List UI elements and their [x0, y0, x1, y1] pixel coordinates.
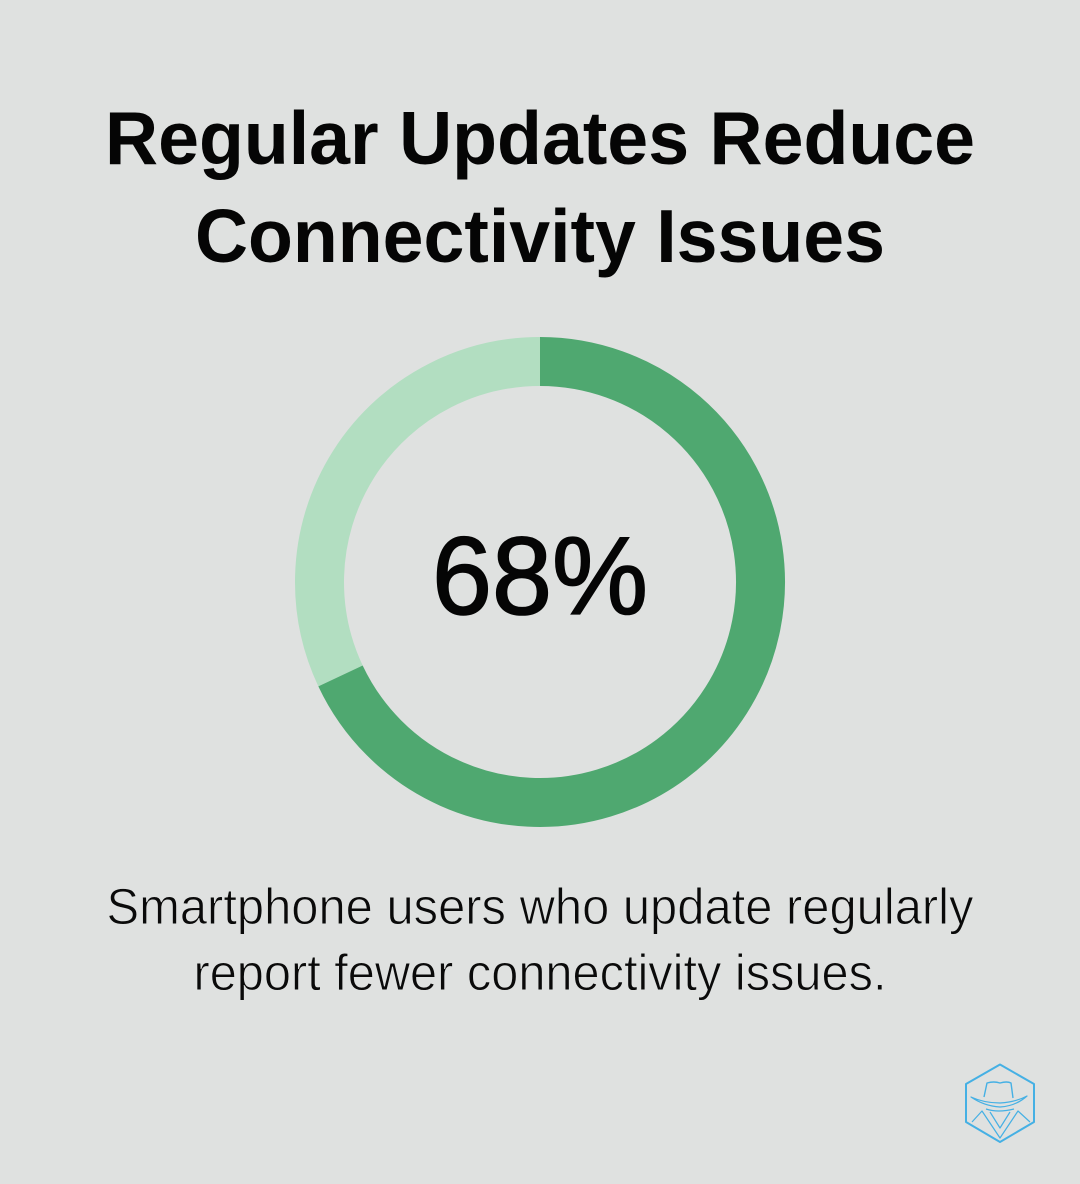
- donut value label: 68%: [432, 515, 648, 638]
- hat crown: [984, 1082, 1013, 1098]
- donut chart: 68%: [320, 362, 761, 802]
- coat collar: [972, 1111, 1030, 1138]
- donut value segment: [340, 362, 761, 802]
- title: Connectivity Issues: [195, 194, 885, 278]
- title: Regular Updates Reduce: [105, 96, 975, 180]
- hexagon outline: [966, 1064, 1034, 1142]
- hat brim: [971, 1096, 1027, 1107]
- description text: [106, 878, 974, 1001]
- description text: Smartphone users who update regularly: [106, 878, 974, 935]
- description text: report fewer connectivity issues.: [194, 944, 886, 1001]
- face shadow: [986, 1109, 1014, 1111]
- title: [105, 96, 975, 278]
- icon: hexagon spy logo: [966, 1064, 1034, 1142]
- donut remainder segment: [320, 362, 540, 676]
